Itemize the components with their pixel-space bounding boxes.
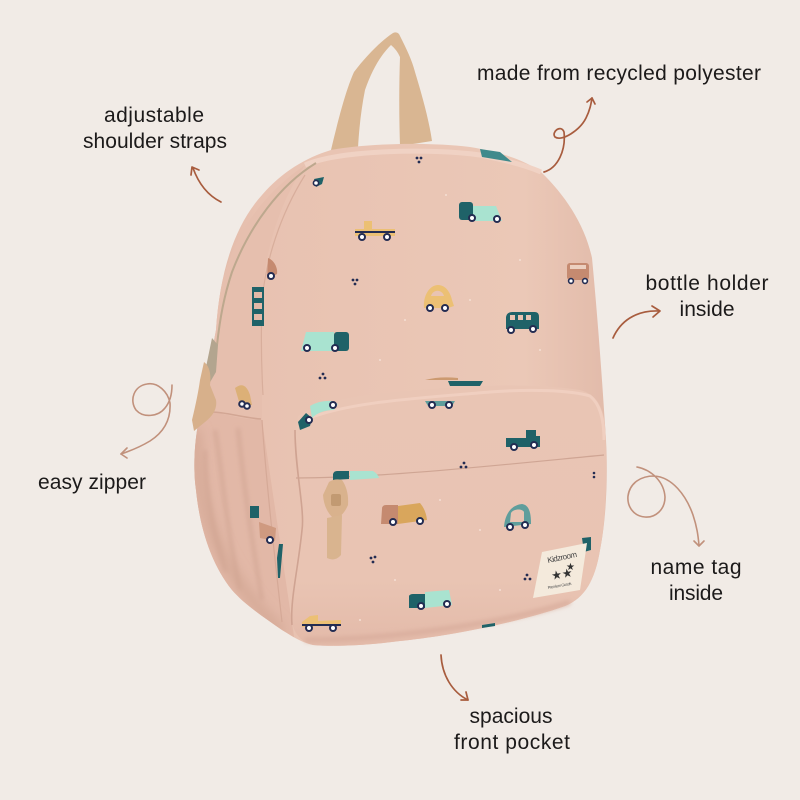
pocket zipper puller <box>323 479 348 559</box>
callout: recycled polyester: made from recycled polyester <box>477 62 761 85</box>
vehicle: side teal bus <box>252 287 264 326</box>
callout: name tag inside <box>650 556 742 605</box>
vehicle: lower yellow pickup <box>302 615 341 631</box>
name label: ★★ <box>550 565 574 583</box>
dot clusters <box>319 157 595 580</box>
main panel seam <box>261 175 305 395</box>
callout: spacious front pocket: front pocket <box>454 731 570 754</box>
vehicle: bottom and edge pieces <box>482 537 591 628</box>
vehicle: zipper mint truck <box>333 471 379 480</box>
front pocket <box>292 386 606 646</box>
main zipper puller <box>192 338 218 431</box>
arrow: name tag <box>628 467 704 546</box>
vehicle: flap flatbed <box>425 377 483 386</box>
zipper track <box>217 163 316 345</box>
name label: ★ <box>566 562 575 573</box>
vehicle: side yellow car <box>235 385 252 409</box>
callout: bottle holder: bottle holder <box>646 272 768 295</box>
gathered pocket edge <box>212 412 261 419</box>
callout: spacious front pocket: spacious <box>470 705 552 728</box>
callout: name tag inside: name tag <box>650 556 742 579</box>
side pocket fill <box>194 420 294 638</box>
vehicle: striped car <box>504 504 531 530</box>
vehicle: yellow car <box>424 285 454 311</box>
vehicle: side rust car <box>267 258 277 279</box>
callout: easy zipper: easy zipper <box>38 471 146 494</box>
callout: bottle holder: inside <box>680 298 734 321</box>
vehicle: side rust truck <box>259 522 276 543</box>
vehicle: yellow pickup <box>355 221 395 240</box>
shading inside silhouette <box>194 284 294 638</box>
callout: adjustable shoulder straps: shoulder straps <box>83 130 227 153</box>
arrow: shoulder straps <box>191 167 221 202</box>
main body silhouette <box>194 144 607 646</box>
pocket left shadow <box>292 430 303 625</box>
name label <box>533 543 587 598</box>
vehicle: teal bus <box>506 312 539 333</box>
callout: bottle holder <box>646 272 768 321</box>
vehicle: top partial <box>313 177 324 187</box>
left edge shade <box>196 430 282 632</box>
fabric specks <box>359 194 541 621</box>
vehicle: top bus <box>480 149 512 162</box>
vehicle: mint truck left <box>301 332 349 351</box>
callout: adjustable shoulder straps: adjustable <box>104 104 204 127</box>
arrow: easy zipper <box>121 384 172 458</box>
callout: name tag inside: inside <box>669 582 723 605</box>
name label: Premium Goods <box>547 581 572 590</box>
bottom shadow <box>305 602 570 640</box>
side pocket folds <box>215 432 262 592</box>
vehicle: pocket striped truck top <box>425 401 455 408</box>
callout: spacious front pocket <box>454 705 570 754</box>
callout: adjustable shoulder straps <box>83 104 227 153</box>
arrow: bottle holder <box>613 306 660 338</box>
gusset seam <box>262 420 282 622</box>
vehicle: pocket mint truck <box>298 401 338 430</box>
backpack illustration <box>190 32 607 650</box>
top seam <box>305 151 541 172</box>
left side panel tone <box>214 284 222 340</box>
vehicle: rust bus <box>567 263 589 283</box>
arrow: front pocket <box>441 655 468 700</box>
vehicle: teal mint truck <box>459 202 502 222</box>
vehicle: side teal pieces <box>250 506 283 578</box>
handle <box>331 32 432 150</box>
name label: Kidzroom <box>547 550 578 565</box>
vehicle: dotted truck <box>381 503 427 525</box>
vehicle: teal pickup <box>506 430 540 450</box>
pocket flap seam <box>296 455 604 478</box>
vehicle: lower teal truck <box>409 590 452 609</box>
arrow: recycled polyester <box>544 98 595 172</box>
pocket piping <box>305 390 604 440</box>
